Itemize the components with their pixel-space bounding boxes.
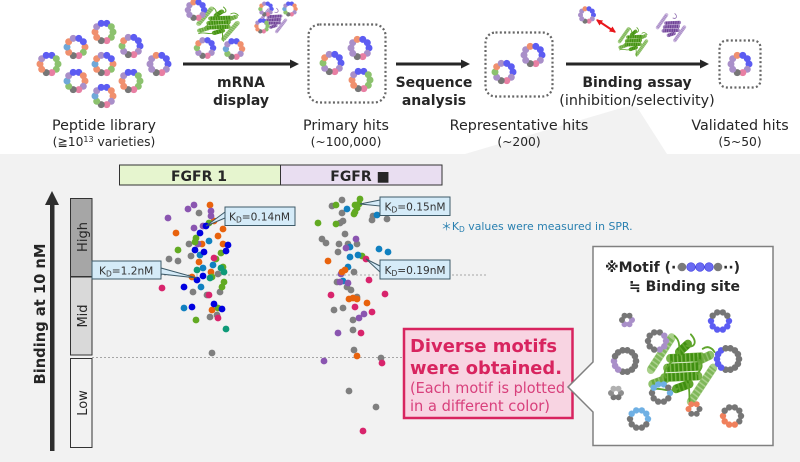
grey lower panel with zoom trapezoid <box>0 106 800 462</box>
label: primary hits <box>303 118 389 149</box>
peptide library rings <box>36 20 172 108</box>
binding level: low: Low <box>76 390 91 416</box>
callout: KD 0.14 nM: =0.14nM <box>242 212 290 224</box>
callout: diverse motifs: Diverse motifs <box>410 336 557 357</box>
binding level: mid: Mid <box>76 304 91 328</box>
callout: KD 1.2 nM <box>92 261 197 279</box>
binding level: high: High <box>76 222 91 252</box>
label: mRNA display: display <box>213 93 269 109</box>
callout: KD 0.19 nM <box>366 259 450 279</box>
label: mRNA display: mRNA <box>217 75 265 91</box>
heading: motif definition: ≒ Binding site <box>629 279 740 295</box>
callout: diverse motifs <box>404 329 572 418</box>
icon: target proteins with bound peptides <box>185 0 298 60</box>
label: representative hits <box>450 118 588 149</box>
header: FGFR 1: FGFR 1 <box>171 169 227 185</box>
heading: motif definition: ※Motif (·· <box>605 260 682 276</box>
arrow: mRNA display <box>183 60 299 68</box>
axis arrow <box>45 191 59 451</box>
callout: KD 0.19 nM: K <box>384 265 391 277</box>
arrow: binding assay <box>566 60 709 68</box>
note: SPR measurement: D <box>459 225 465 234</box>
label: peptide library <box>52 118 157 149</box>
label: peptide library: (≧10 <box>53 135 83 149</box>
label: validated hits: (5~50) <box>718 135 762 149</box>
label: primary hits: (~100,000) <box>311 135 381 149</box>
callout: KD 0.15 nM: K <box>384 202 391 214</box>
note: SPR measurement: values were measured in SPR. <box>465 220 633 233</box>
label: binding assay <box>559 75 715 109</box>
label: primary hits: Primary hits <box>303 118 389 134</box>
label: validated hits <box>691 118 789 149</box>
scatter: FGFR masked <box>315 196 391 434</box>
callout: diverse motifs: (Each motif is plotted <box>410 379 565 397</box>
label: mRNA display <box>213 75 269 109</box>
binding level: mid <box>70 277 92 355</box>
callout: KD 1.2 nM: K <box>99 266 106 278</box>
peptide motif rings <box>608 309 744 431</box>
callout: KD 0.14 nM <box>206 207 295 226</box>
panel: motif binding site <box>568 246 773 446</box>
callout: KD 1.2 nM: =1.2nM <box>112 266 153 278</box>
header: FGFR masked <box>280 165 442 185</box>
heading: motif definition: ··) <box>723 260 740 276</box>
icon: protein structure <box>651 334 715 406</box>
label: sequence analysis: analysis <box>402 93 466 109</box>
header: FGFR 1 <box>120 165 280 185</box>
callout: diverse motifs: were obtained. <box>410 358 562 379</box>
note: SPR measurement: ＊K <box>441 220 459 233</box>
callout: KD 0.14 nM: D <box>236 216 242 224</box>
label: validated hits: Validated hits <box>691 118 789 134</box>
panel: validated hits <box>720 40 760 88</box>
label: sequence analysis: Sequence <box>396 75 472 91</box>
callout: diverse motifs: in a different color) <box>410 397 550 415</box>
label: binding assay: Binding assay <box>582 75 692 91</box>
panel: primary hits <box>308 24 386 102</box>
scatter: FGFR 1 <box>159 202 231 356</box>
binding level: high <box>70 198 92 276</box>
label: peptide library: 13 <box>83 135 94 144</box>
label: peptide library: varieties) <box>94 135 155 149</box>
binding level: low <box>70 358 92 448</box>
callout: KD 0.15 nM: D <box>391 206 397 214</box>
label: representative hits: Representative hits <box>450 118 588 134</box>
label: representative hits: (~200) <box>497 135 541 149</box>
callout: KD 0.14 nM: K <box>229 212 236 224</box>
callout: KD 1.2 nM: D <box>106 270 112 278</box>
label: binding assay: (inhibition/selectivity) <box>559 93 715 109</box>
panel: representative hits <box>486 32 552 96</box>
callout: KD 0.15 nM <box>360 197 450 216</box>
callout: KD 0.19 nM: =0.19nM <box>397 265 446 277</box>
icon: binding assay illustration <box>578 6 684 56</box>
header: FGFR masked: FGFR ■ <box>330 169 390 185</box>
callout: KD 0.15 nM: =0.15nM <box>397 202 446 214</box>
heading: motif definition <box>605 260 740 295</box>
label: peptide library: Peptide library <box>52 118 157 134</box>
callout: KD 0.19 nM: D <box>391 269 397 278</box>
arrow: sequence analysis <box>396 60 470 68</box>
label: sequence analysis <box>396 75 472 109</box>
axis title: Binding at 10 nM <box>31 244 49 384</box>
